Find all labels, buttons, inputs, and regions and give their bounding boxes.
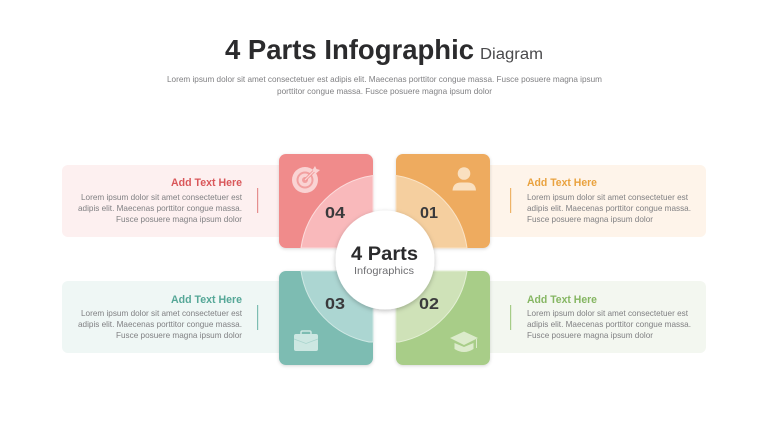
icon: graduation cap [450,332,478,352]
panel: 01 text: Lorem ipsum dolor sit amet consectetuer est [527,192,689,202]
panel: 02 text [480,281,706,353]
icon: person [452,167,476,190]
arc: 01 [396,176,467,248]
square: 01 orange [396,154,490,248]
number: 02: 02 [419,296,439,313]
panel: 03 text [62,281,290,353]
panel: 03 text: Lorem ipsum dolor sit amet consectetuer est [81,308,243,318]
title: Diagram [480,46,543,63]
number: 01: 01 [420,205,438,222]
square: 02 green [396,271,490,365]
panel: 04 text [62,165,290,237]
icon: briefcase [294,331,318,351]
center circle [336,210,434,310]
panel: 02 text: Fusce posuere magna ipsum dolor [527,330,653,340]
panel: 03 text: Fusce posuere magna ipsum dolor [116,330,242,340]
heading: 02: Add Text Here [527,294,597,306]
arc: 04 [301,176,373,248]
subtitle text [167,74,602,96]
center subtitle: Infographics [354,265,414,277]
heading: 04: Add Text Here [171,177,242,189]
panel: 01 text [480,165,706,237]
heading: 01: Add Text Here [527,177,597,189]
number: 04: 04 [325,205,345,222]
panel: 04 text: Lorem ipsum dolor sit amet consectetuer est [81,192,243,202]
panel: 03 text: adipis elit. Maecenas porttitor congue massa. [78,319,242,329]
panel: 04 text: adipis elit. Maecenas porttitor congue massa. [78,203,242,213]
arc: 02 [396,271,467,342]
subtitle text: porttitor congue massa. Fusce posuere magna ipsum dolor [277,86,492,96]
heading: 03: Add Text Here [171,294,242,306]
square: 04 red [279,154,373,248]
panel: 04 text: Fusce posuere magna ipsum dolor [116,214,242,224]
square: 03 teal [279,271,373,365]
number: 03: 03 [325,296,345,313]
title: 4 Parts Infographic [225,34,474,65]
panel: 01 text: Fusce posuere magna ipsum dolor [527,214,653,224]
center title: 4 Parts [351,243,418,265]
panel: 01 text: adipis elit. Maecenas porttitor congue massa. [527,203,691,213]
subtitle text: Lorem ipsum dolor sit amet consectetuer est adipis elit. Maecenas porttitor congue massa. Fusce posuere magna ipsum [167,74,602,84]
panel: 02 text: Lorem ipsum dolor sit amet consectetuer est [527,308,689,318]
panel: 02 text: adipis elit. Maecenas porttitor congue massa. [527,319,691,329]
icon: target [292,166,320,193]
arc: 03 [301,271,373,342]
